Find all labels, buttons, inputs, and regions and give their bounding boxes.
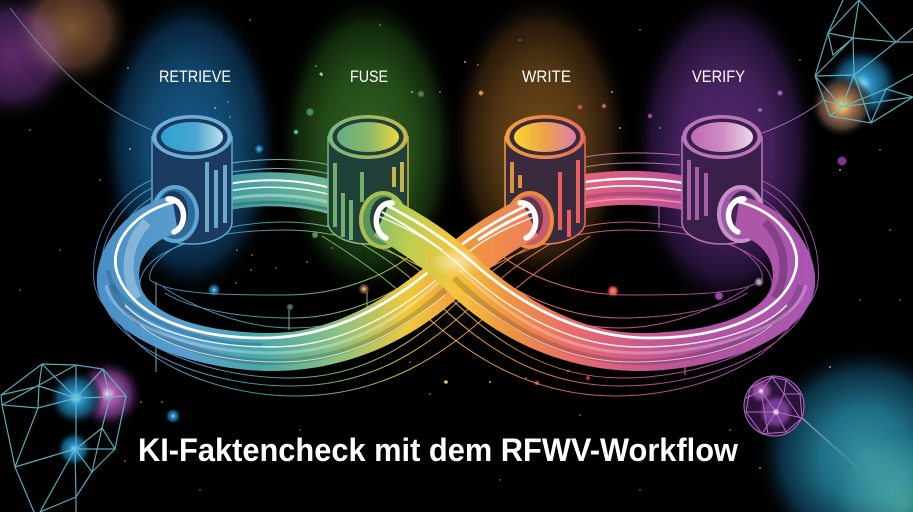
wire line: top left to retrieve (10, 8, 152, 130)
thin orbit lines: right lobe (322, 153, 818, 396)
label: fuse: FUSE (350, 68, 388, 86)
glow: bottom left corner (48, 358, 144, 467)
label: retrieve: RETRIEVE (159, 68, 231, 86)
wire sphere: bottom right (744, 376, 804, 436)
tube openings: white crescents (168, 199, 744, 238)
crossing highlight (430, 247, 482, 277)
thin orbit lines: left lobe (94, 159, 590, 396)
connector band: write to verify (580, 179, 690, 204)
glow: verify column (630, 0, 820, 315)
cylinder: write (505, 115, 585, 244)
tube: left lobe, retrieve through crossing to write (97, 196, 538, 371)
outlet ring: write (506, 191, 554, 249)
wire polyhedron: bottom left (1, 364, 126, 512)
label: verify: VERIFY (692, 68, 745, 86)
outlet ring: verify (717, 185, 765, 243)
outlet ring: fuse (359, 191, 407, 249)
wire line: verify to top right polyhedron (762, 100, 824, 133)
glow: fuse column (276, 0, 460, 300)
label: write: WRITE (522, 68, 571, 86)
glow: top right corner (810, 46, 900, 138)
wire line: sphere to corner glow (802, 418, 860, 470)
tube: right lobe, verify through crossing to fuse (374, 196, 815, 371)
glowing particles (165, 72, 846, 424)
wire polyhedron: top right (815, 0, 913, 123)
glow: top left corner (0, 0, 134, 125)
glow: bottom right corner (750, 340, 913, 512)
glow: write column (448, 0, 632, 290)
title: KI-Faktencheck mit dem RFWV-Workflow (138, 432, 738, 468)
outlet ring: retrieve (151, 185, 199, 243)
cylinder: retrieve (152, 115, 232, 244)
cylinder: verify (682, 115, 762, 244)
glow: retrieve column (98, 0, 282, 300)
cylinder: fuse (328, 115, 408, 244)
connector band: retrieve to fuse (228, 180, 335, 211)
